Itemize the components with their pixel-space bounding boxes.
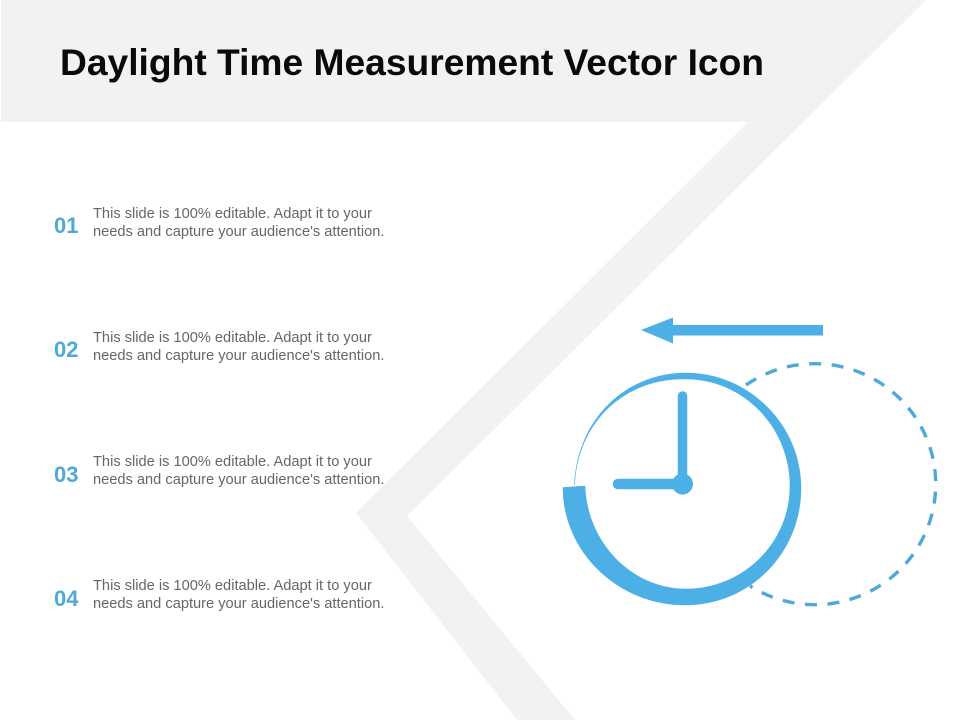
number 04: 04 [54, 586, 78, 611]
item 02 [54, 330, 384, 364]
icon: clock ring [563, 373, 801, 605]
title: Daylight Time Measurement Vector Icon [60, 41, 764, 83]
icon: minute hand [678, 396, 687, 484]
item 01 [54, 206, 384, 240]
text 02: This slide is 100% editable. Adapt it to your needs and capture your audience's attention. [93, 330, 384, 364]
number 02: 02 [54, 337, 78, 362]
text 01: This slide is 100% editable. Adapt it to your needs and capture your audience's attention. [93, 206, 384, 240]
icon: left arrow [641, 318, 823, 344]
item 04 [54, 578, 384, 612]
text 04: This slide is 100% editable. Adapt it to your needs and capture your audience's attention. [93, 578, 384, 612]
text 03: This slide is 100% editable. Adapt it to your needs and capture your audience's attention. [93, 454, 384, 488]
icon: clock pivot [672, 474, 693, 494]
icon: hour hand [618, 479, 682, 489]
number 01: 01 [54, 213, 78, 238]
item 03 [54, 454, 384, 488]
number 03: 03 [54, 462, 78, 487]
icon: dashed circle [746, 364, 936, 605]
